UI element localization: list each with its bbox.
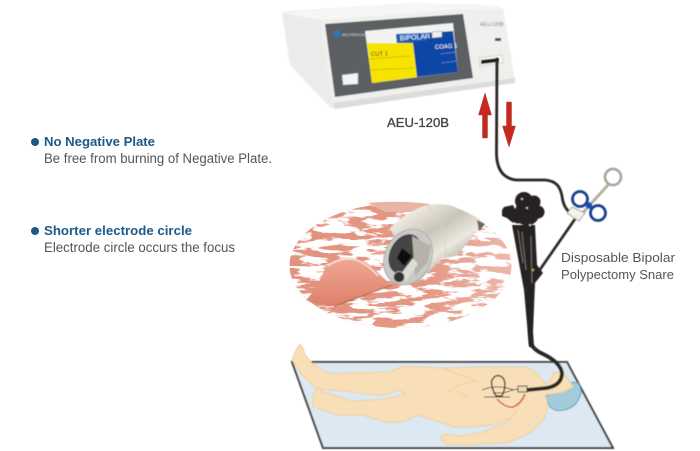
- output socket: [479, 55, 503, 66]
- snare shaft: [539, 219, 575, 271]
- blue finger rings: [572, 192, 606, 220]
- snare label: Disposable Bipolar: [561, 250, 676, 265]
- bullet: Shorter electrode circle: [31, 223, 235, 255]
- touch screen: COAG 1: [435, 43, 458, 51]
- polyp: [306, 258, 392, 306]
- endoscope insertion cable: [527, 330, 562, 390]
- electrosurgical unit: AEU MEDICAL: [342, 33, 366, 37]
- endoscope body: [512, 225, 543, 347]
- snare label: [561, 250, 676, 282]
- bullet: No Negative Plate: Be free from burning of Negative Plate.: [44, 151, 272, 166]
- electrosurgical unit: [282, 3, 515, 109]
- bullet: Shorter electrode circle: Shorter electrode circle: [44, 223, 192, 238]
- accessory port: [532, 269, 534, 271]
- touch screen: BIPOLAR: [400, 33, 430, 42]
- surgical cap: [545, 382, 581, 411]
- endoscope highlights: [518, 230, 532, 283]
- touch screen: CUT 1: [371, 51, 389, 58]
- internal snare loop: [482, 376, 527, 397]
- endoscope tip: [374, 204, 485, 293]
- bullet: No Negative Plate: [31, 134, 272, 166]
- arrow: down signal: [502, 102, 516, 147]
- patient body: [292, 344, 573, 445]
- red current arc: [497, 394, 525, 407]
- tissue disc: [290, 202, 512, 328]
- electrosurgical unit: AEU-120B: [480, 22, 504, 28]
- bullet: Shorter electrode circle: Electrode circle occurs the focus: [44, 240, 235, 255]
- handle and snare assembly: [502, 169, 621, 347]
- snare stem: [578, 185, 608, 218]
- table mat: [292, 362, 613, 448]
- arrow: up signal: [478, 93, 492, 138]
- touch screen: [365, 23, 458, 83]
- patient on table: [292, 330, 613, 448]
- model label: AEU-120B: [387, 115, 449, 130]
- endoscope control head: [502, 192, 544, 226]
- cable from generator to handle: [496, 58, 571, 213]
- snare label: Polypectomy Snare: [561, 267, 674, 282]
- slider clamp: [567, 207, 585, 221]
- bullet: No Negative Plate: No Negative Plate: [44, 134, 155, 149]
- ring hub: [586, 202, 592, 209]
- polypectomy close-up view: [290, 202, 512, 328]
- grey thumb ring: [605, 169, 621, 185]
